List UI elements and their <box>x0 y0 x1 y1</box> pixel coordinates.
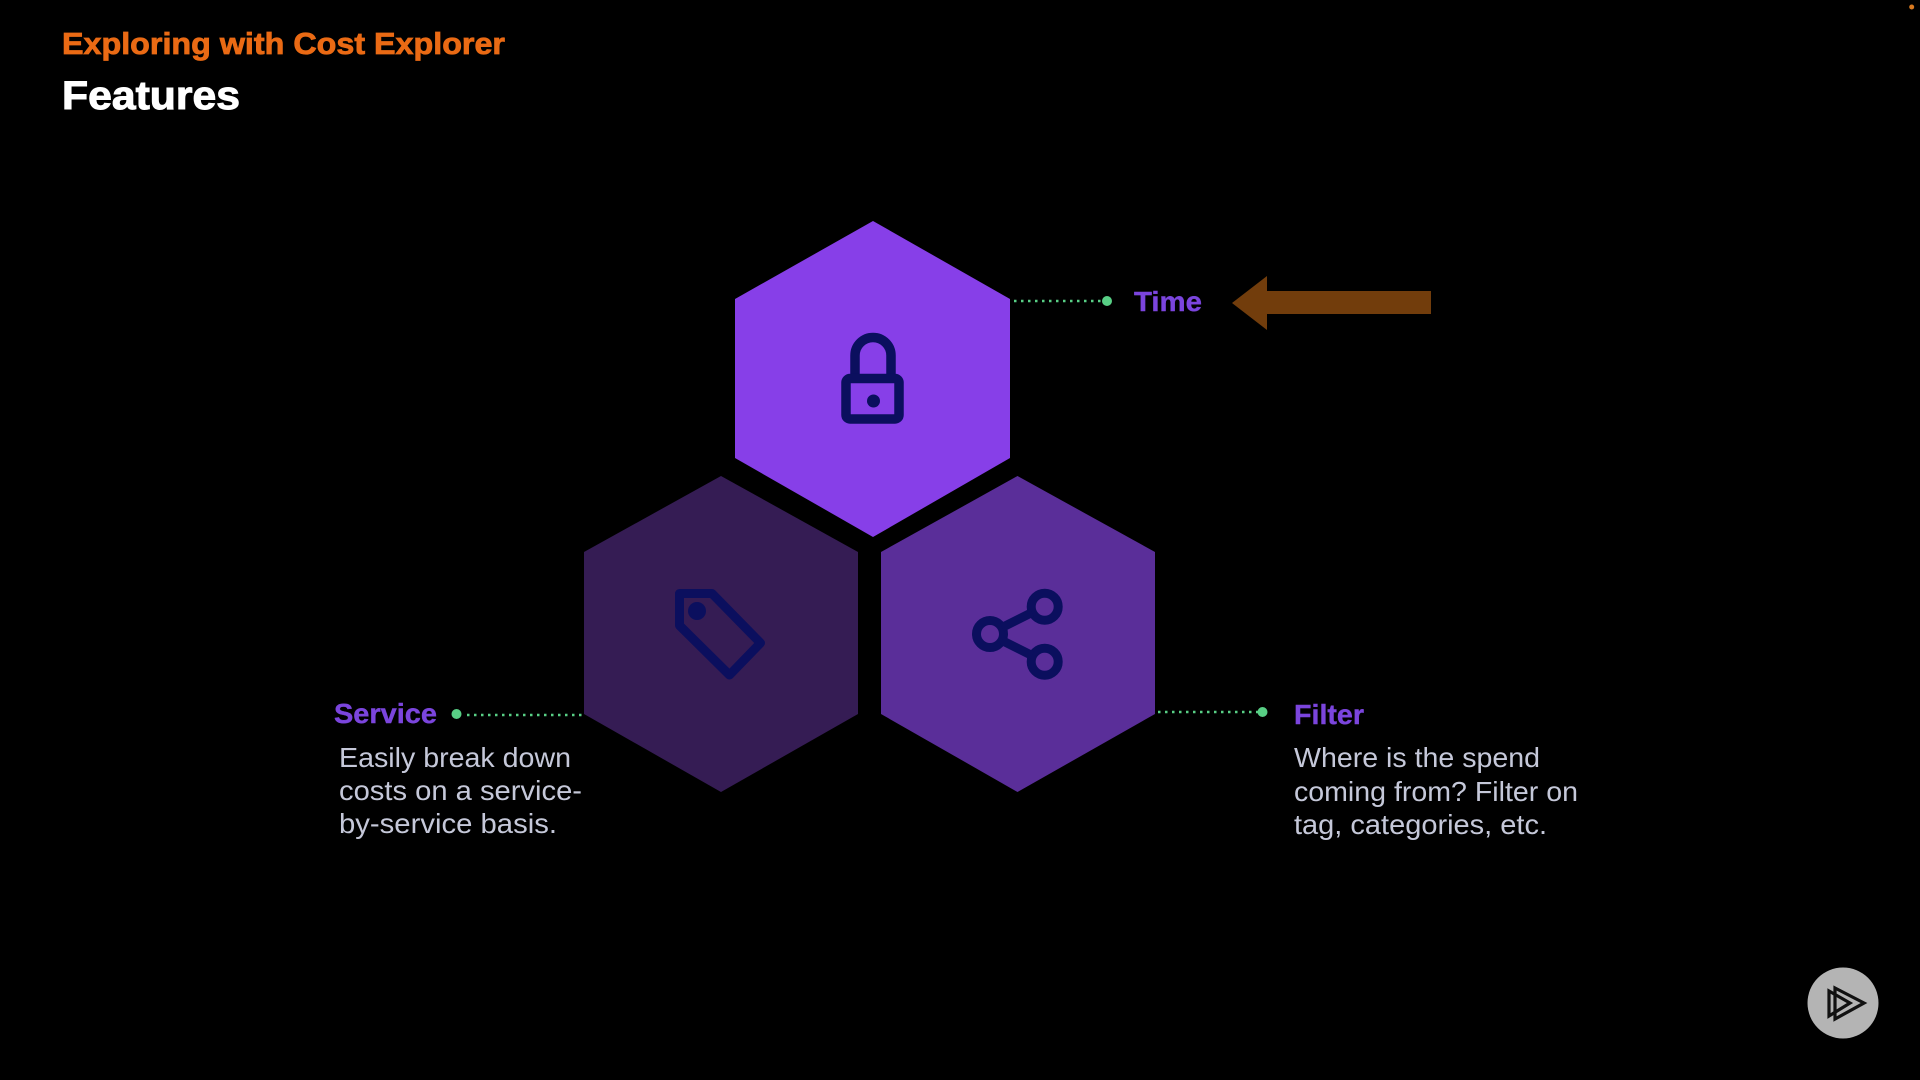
callout: Filter <box>1158 699 1578 840</box>
description: Filter: Where is the spend <box>1294 742 1540 773</box>
description: Filter <box>1294 742 1578 840</box>
label: Filter: Filter <box>1294 699 1364 730</box>
connector: Time <box>1014 296 1112 306</box>
label: Time: Time <box>1134 286 1202 317</box>
subtitle: Exploring with Cost Explorer: Exploring with Cost Explorer <box>62 26 505 61</box>
hexagon: Time <box>735 221 1010 537</box>
hexagon: Service <box>584 476 858 792</box>
icon: lock <box>846 338 899 419</box>
logo badge: play icon <box>1808 968 1878 1038</box>
description: Filter: coming from? Filter on <box>1294 776 1578 807</box>
header <box>62 26 505 118</box>
description: Filter: tag, categories, etc. <box>1294 809 1547 840</box>
callout: Time <box>1014 286 1202 317</box>
icon: share nodes <box>976 593 1058 675</box>
label: Service: Service <box>334 698 437 729</box>
connector: Filter <box>1158 707 1268 717</box>
status dot <box>1909 4 1914 10</box>
description: Service: costs on a service- <box>339 775 582 806</box>
callout: Service <box>334 698 583 839</box>
connector: Service <box>452 709 583 719</box>
hexagon: Filter <box>881 476 1155 792</box>
icon: price tag <box>680 594 760 675</box>
title: Features: Features <box>62 74 240 118</box>
arrow pointing at Time <box>1232 276 1431 330</box>
description: Service: Easily break down <box>339 742 571 773</box>
description: Service: by-service basis. <box>339 808 557 839</box>
description: Service <box>339 742 582 839</box>
